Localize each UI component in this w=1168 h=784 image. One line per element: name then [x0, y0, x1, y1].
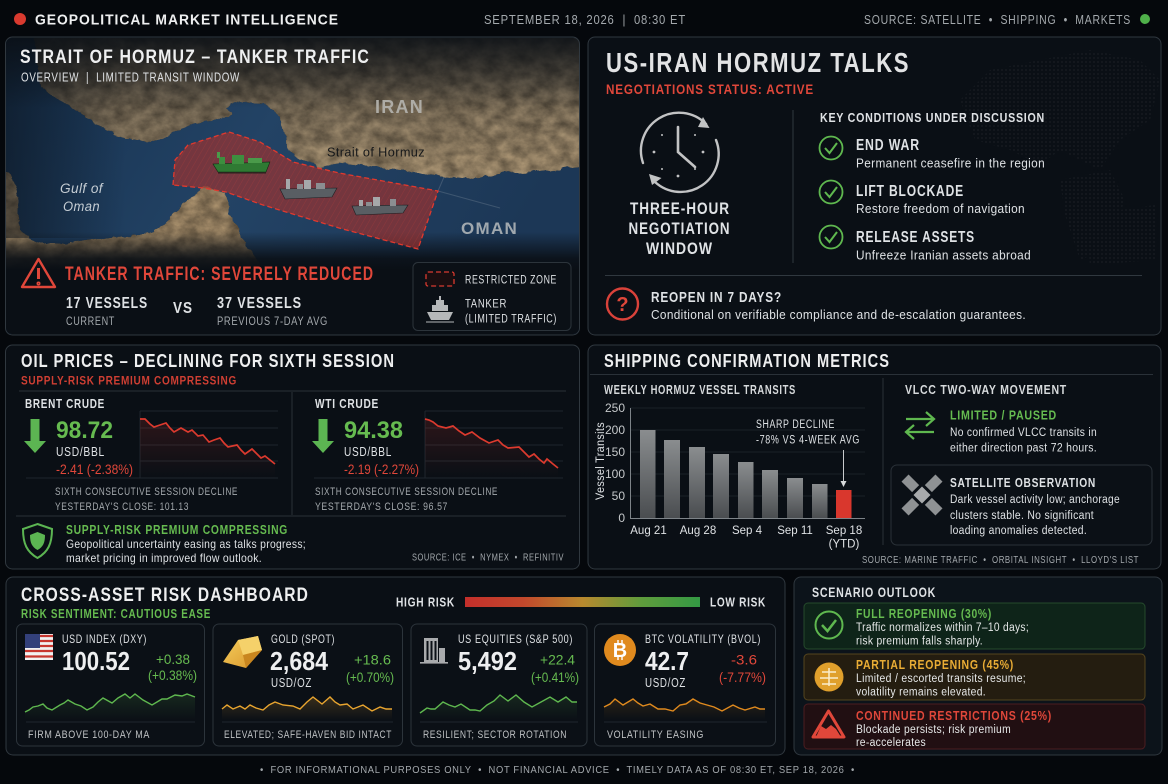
status dot: green: [1140, 14, 1150, 24]
oil source note: SOURCE: ICE • NYMEX • REFINITIV: [412, 552, 564, 564]
bar chart: weekly transits: Aug 21: [630, 525, 667, 537]
condition: lift blockade: LIFT BLOCKADE: [856, 183, 964, 200]
condition: release assets: RELEASE ASSETS: [856, 229, 975, 246]
versus label: VS: [173, 300, 193, 317]
icon: shield: [23, 524, 52, 558]
scenario: continued restrictions: Blockade persists; risk premium: [856, 724, 1011, 736]
footer disclaimer: • FOR INFORMATIONAL PURPOSES ONLY • NOT FINANCIAL ADVICE • TIMELY DATA AS OF 08:30 ET, SEP 18, 2026 •: [260, 764, 855, 776]
stat: current vessels: 17 VESSELS: [66, 295, 148, 312]
bar chart: weekly transits: Aug 28: [680, 525, 716, 537]
negotiation window label: WINDOW: [646, 240, 713, 258]
scenario: full reopening: Traffic normalizes within 7–10 days;: [856, 622, 1029, 634]
sparkline: [222, 697, 392, 720]
reopen callout: REOPEN IN 7 DAYS?: [651, 289, 782, 306]
risk sentiment: RISK SENTIMENT: CAUTIOUS EASE: [21, 607, 211, 621]
panel: shipping confirmation metrics: [588, 345, 1161, 569]
panel subtitle: SUPPLY-RISK PREMIUM COMPRESSING: [21, 374, 237, 388]
icon: us flag: [25, 634, 53, 660]
panel: cross-asset risk dashboard: [6, 577, 785, 755]
bar chart: weekly transits: Sep 18: [826, 525, 862, 537]
icon: warning triangle: [22, 259, 55, 287]
icon: down arrow: [24, 419, 46, 453]
wti crude block: WTI CRUDE: [315, 397, 379, 411]
panel title: US-IRAN HORMUZ TALKS: [606, 47, 910, 78]
supply-risk callout: Geopolitical uncertainty easing as talks progress;: [66, 537, 306, 551]
condition: end war: Permanent ceasefire in the region: [856, 156, 1045, 170]
icon: gold bar: [223, 636, 262, 668]
supply-risk callout: market pricing in improved flow outlook.: [66, 551, 262, 565]
map of the strait: [0, 20, 590, 334]
key conditions heading: KEY CONDITIONS UNDER DISCUSSION: [820, 110, 1045, 125]
scenario: continued restrictions: [804, 704, 1145, 749]
negotiation status: NEGOTIATIONS STATUS: ACTIVE: [606, 82, 814, 97]
condition: lift blockade: Restore freedom of navigation: [856, 201, 1025, 216]
card: us equities: 5,492: [458, 646, 517, 676]
map label: gulf of oman: Gulf of: [60, 181, 104, 196]
supply-risk callout: [66, 523, 306, 565]
stat: current vessels: [66, 295, 148, 328]
card: usd index: USD INDEX (DXY): [62, 632, 147, 646]
card: btc volatility: VOLATILITY EASING: [607, 729, 704, 741]
map label: gulf of oman: Oman: [63, 199, 100, 214]
wti crude block: -2.19 (-2.27%): [344, 462, 419, 477]
card: usd index: 100.52: [62, 646, 130, 676]
stat: previous average: PREVIOUS 7-DAY AVG: [217, 316, 328, 328]
negotiation window label: NEGOTIATION: [628, 220, 730, 238]
risk scale: LOW RISK: [710, 596, 766, 610]
card: btc volatility: (-7.77%): [719, 669, 766, 685]
icon: two-way arrows: [906, 412, 934, 439]
legend label: restricted zone: RESTRICTED ZONE: [465, 274, 557, 286]
sparkline: [25, 694, 195, 720]
scenario: partial reopening: [804, 654, 1145, 700]
card: gold: (+0.70%): [346, 669, 394, 685]
condition: lift blockade: [820, 180, 1025, 216]
wti crude block: 94.38: [344, 417, 403, 444]
legend swatch: restricted zone: [426, 272, 454, 286]
icon: warning roadblock: [813, 711, 844, 737]
card: btc volatility: -3.6: [731, 652, 757, 668]
icon: bitcoin: B: [613, 640, 627, 662]
bar chart: weekly transits: 100: [605, 467, 625, 481]
bar chart: weekly transits: [595, 401, 865, 550]
icon: down arrow: [312, 419, 334, 453]
vlcc status: No confirmed VLCC transits in: [950, 427, 1097, 439]
status dot: red: [14, 13, 26, 25]
scenario: partial reopening: PARTIAL REOPENING (45%): [856, 657, 1014, 672]
bar chart: weekly transits: (YTD): [829, 538, 859, 550]
bar chart: weekly transits: Sep 11: [777, 525, 813, 537]
scenario: full reopening: FULL REOPENING (30%): [856, 606, 992, 621]
card: us equities: RESILIENT; SECTOR ROTATION: [423, 729, 567, 741]
chart annotation: -78% VS 4-WEEK AVG: [756, 434, 860, 446]
bar chart: weekly transits: Sep 4: [732, 525, 763, 537]
icon: buildings: [420, 638, 448, 664]
icon: question mark: ?: [616, 294, 629, 316]
card: gold: ELEVATED; SAFE-HAVEN BID INTACT: [224, 729, 392, 741]
card: us equities: US EQUITIES (S&P 500): [458, 632, 573, 646]
map label: oman: OMAN: [461, 219, 518, 238]
map label: iran: IRAN: [375, 97, 424, 117]
condition: release assets: [820, 226, 1031, 262]
brent crude block: -2.41 (-2.38%): [56, 462, 133, 477]
sparkline: [420, 695, 577, 720]
vlcc status: either direction past 72 hours.: [950, 442, 1097, 454]
scenario: partial reopening: volatility remains elevated.: [856, 686, 986, 698]
panel subtitle: OVERVIEW | LIMITED TRANSIT WINDOW: [21, 70, 240, 84]
wti crude block: [312, 397, 563, 513]
card: usd index: (+0.38%): [148, 667, 197, 683]
legend label: tanker: TANKER: [465, 298, 507, 310]
stat: previous average: [217, 295, 328, 328]
panel: strait of hormuz tanker traffic: [0, 20, 590, 335]
wti line chart: [314, 411, 563, 478]
brent crude block: BRENT CRUDE: [25, 397, 105, 411]
stat: current vessels: CURRENT: [66, 316, 115, 328]
panel: oil prices: [6, 345, 580, 569]
card: us equities: (+0.41%): [531, 669, 579, 685]
card: us equities: +22.4: [540, 652, 575, 668]
wti crude block: YESTERDAY'S CLOSE: 96.57: [315, 501, 448, 513]
bar chart: weekly transits: 150: [605, 445, 625, 459]
supply-risk callout: SUPPLY-RISK PREMIUM COMPRESSING: [66, 523, 288, 537]
bar chart: weekly transits: 200: [605, 423, 625, 437]
panel title: SCENARIO OUTLOOK: [812, 585, 936, 600]
bar chart: weekly transits: Vessel Transits: [595, 422, 607, 500]
header bar: [14, 12, 1150, 28]
satellite observation box: clusters stable. No significant: [950, 510, 1094, 522]
scenario: partial reopening: Limited / escorted transits resume;: [856, 673, 1026, 685]
negotiation window label: THREE-HOUR: [630, 200, 730, 218]
panel title: OIL PRICES – DECLINING FOR SIXTH SESSION: [21, 350, 395, 371]
sparkline: [604, 699, 765, 720]
icon: check: [816, 612, 842, 638]
card: gold: 2,684: [270, 646, 328, 676]
scenario: full reopening: risk premium falls sharply.: [856, 636, 983, 648]
tanker: gray right: [352, 197, 408, 215]
icon: clock: [641, 113, 719, 192]
map legend: [413, 262, 571, 330]
card: gold: [213, 624, 402, 746]
bar chart: weekly transits: 250: [605, 401, 625, 415]
scenario: continued restrictions: CONTINUED RESTRICTIONS (25%): [856, 708, 1052, 723]
panel title: SHIPPING CONFIRMATION METRICS: [604, 350, 890, 371]
card: gold: GOLD (SPOT): [271, 632, 335, 646]
scenario: full reopening: [804, 603, 1145, 649]
tanker: gray middle: [280, 179, 337, 199]
condition: end war: END WAR: [856, 137, 920, 154]
scenario: continued restrictions: re-accelerates: [856, 737, 926, 749]
chart heading: WEEKLY HORMUZ VESSEL TRANSITS: [604, 383, 796, 397]
background world map dots: [960, 50, 1160, 265]
stat: previous average: 37 VESSELS: [217, 295, 302, 312]
panel: scenario outlook: [794, 577, 1162, 755]
vlcc status: [950, 408, 1097, 454]
panel title: CROSS-ASSET RISK DASHBOARD: [21, 585, 309, 606]
satellite observation box: SATELLITE OBSERVATION: [950, 475, 1096, 490]
satellite observation box: Dark vessel activity low; anchorage: [950, 494, 1120, 506]
icon: bitcoin: [604, 634, 636, 666]
tanker: green: [213, 152, 270, 174]
risk scale: [396, 596, 766, 610]
bar chart: weekly transits: 0: [618, 511, 625, 525]
reopen callout: [651, 289, 1026, 322]
card: gold: +18.6: [354, 652, 391, 668]
header title: GEOPOLITICAL MARKET INTELLIGENCE: [35, 12, 339, 28]
restricted zone: [173, 132, 438, 249]
card: usd index: FIRM ABOVE 100-DAY MA: [28, 729, 150, 741]
card: btc volatility: USD/OZ: [645, 676, 686, 690]
brent crude block: 98.72: [56, 417, 113, 444]
brent crude block: [24, 397, 278, 513]
map label: strait of hormuz: Strait of Hormuz: [327, 144, 425, 160]
reopen callout: Conditional on verifiable compliance and de-escalation guarantees.: [651, 307, 1026, 322]
card: usd index: [16, 624, 204, 746]
brent crude block: YESTERDAY'S CLOSE: 101.13: [55, 501, 189, 513]
wti crude block: USD/BBL: [344, 445, 392, 459]
panel title: STRAIT OF HORMUZ – TANKER TRAFFIC: [20, 46, 370, 68]
brent crude block: USD/BBL: [56, 445, 105, 459]
card: us equities: [411, 624, 587, 746]
card: usd index: +0.38: [156, 651, 190, 667]
vlcc heading: VLCC TWO-WAY MOVEMENT: [905, 383, 1067, 397]
panel: us-iran hormuz talks: [588, 37, 1161, 335]
wti crude block: SIXTH CONSECUTIVE SESSION DECLINE: [315, 486, 498, 498]
card: btc volatility: [594, 624, 776, 746]
card: gold: USD/OZ: [271, 676, 312, 690]
condition: end war: [820, 136, 1045, 170]
vlcc status: LIMITED / PAUSED: [950, 408, 1057, 422]
icon: partial reopening badge: [814, 662, 844, 692]
satellite observation box: loading anomalies detected.: [950, 525, 1087, 537]
alert headline: TANKER TRAFFIC: SEVERELY REDUCED: [65, 263, 374, 285]
risk scale: HIGH RISK: [396, 596, 455, 610]
legend icon: tanker: [426, 296, 454, 322]
card: btc volatility: 42.7: [645, 646, 689, 676]
condition: release assets: Unfreeze Iranian assets abroad: [856, 248, 1031, 262]
bar chart: weekly transits: 50: [612, 489, 625, 503]
chart annotation: [756, 419, 860, 487]
header date: SEPTEMBER 18, 2026 | 08:30 ET: [484, 13, 686, 27]
brent crude block: SIXTH CONSECUTIVE SESSION DECLINE: [55, 486, 238, 498]
icon: satellite: [888, 461, 956, 529]
satellite observation box: [888, 461, 1152, 545]
icon: question mark: [607, 288, 638, 320]
legend label: tanker: (LIMITED TRAFFIC): [465, 314, 557, 326]
border line: [438, 177, 500, 208]
chart annotation: SHARP DECLINE: [756, 419, 835, 431]
card: btc volatility: BTC VOLATILITY (BVOL): [645, 632, 761, 646]
brent line chart: [26, 411, 278, 478]
